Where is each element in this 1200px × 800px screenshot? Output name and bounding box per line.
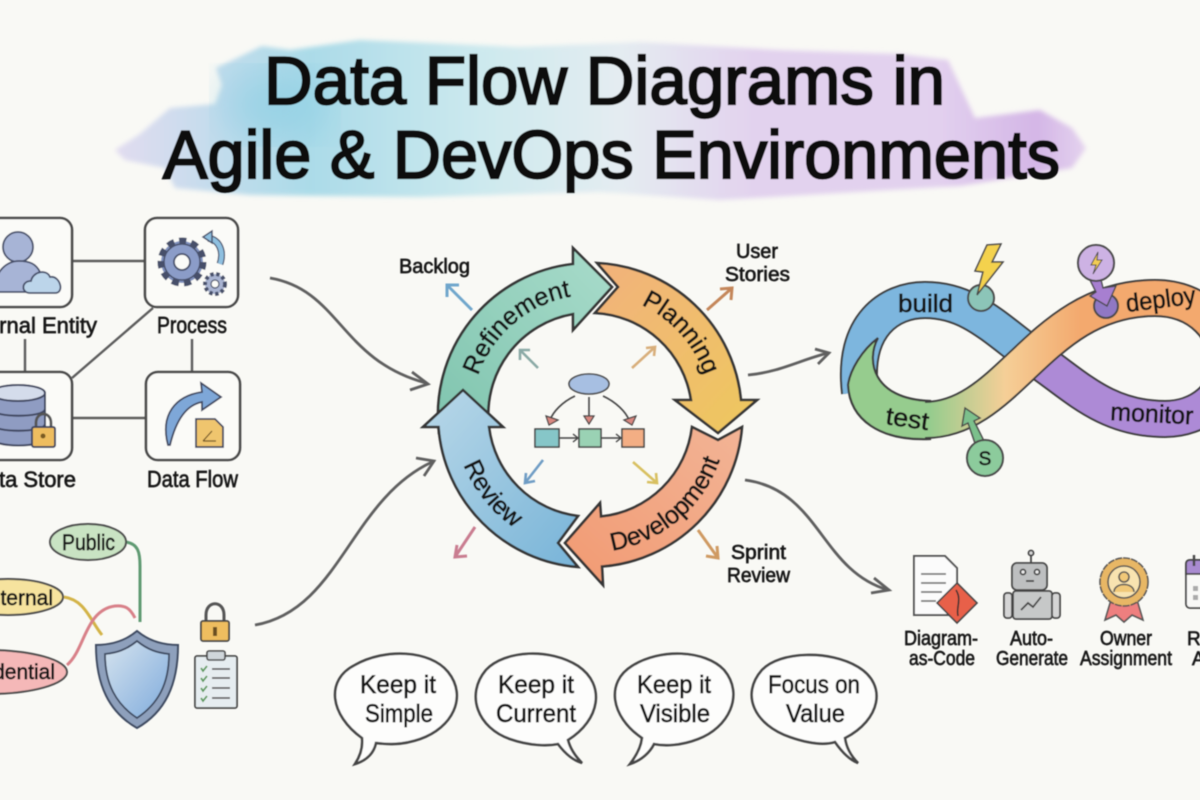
arrow: development [562, 424, 744, 589]
tool: diagram-as-code: Diagram- [904, 628, 978, 650]
panel: data classification [0, 524, 237, 728]
bubble: keep it current: Keep it [498, 671, 574, 699]
inner arrows [520, 347, 657, 483]
arrow: agile cycle to tools [745, 480, 889, 593]
ribbon: monitor [1035, 358, 1200, 419]
icon: robot [1004, 550, 1060, 619]
ribbon: build [859, 300, 1050, 392]
arrow: planning [592, 260, 761, 436]
icon: checklist clipboard [195, 651, 237, 708]
label: user stories [725, 241, 790, 286]
icon: calendar [1186, 555, 1200, 608]
label: backlog: Backlog [399, 256, 470, 278]
icon: deploy trigger [1078, 245, 1118, 318]
panel: best practices bubbles [335, 654, 877, 764]
title line 2: Agile & DevOps Environments [163, 117, 1060, 193]
bubble: focus on value: Value [786, 700, 845, 728]
tool: owner assignment: Owner [1100, 628, 1152, 650]
label: build: build [898, 290, 953, 318]
title line 1: Data Flow Diagrams in [264, 43, 945, 119]
watercolor title wash [115, 40, 1086, 200]
icon: person and cloud [0, 232, 60, 293]
bubble: keep it simple [335, 654, 457, 764]
arrow: DFD elements to agile cycle [270, 278, 428, 390]
external entity box [0, 218, 72, 307]
bubble: keep it visible [615, 654, 733, 764]
chart: devops infinity loop [848, 244, 1200, 476]
arrow: refinement: Refinement [462, 280, 572, 375]
tool: owner assignment: Assignment [1080, 648, 1172, 670]
label: monitor: monitor [1110, 398, 1194, 430]
icon: document and git diamond [914, 556, 977, 623]
arrow: planning: Planning [642, 290, 718, 375]
bubble: keep it simple: Keep it [360, 671, 436, 699]
bubble: keep it current: Current [496, 700, 576, 728]
bubble: focus on value: Focus on [768, 671, 860, 699]
bubble: keep it simple: Simple [365, 700, 433, 728]
label: sprint review: Sprint [731, 542, 786, 564]
tag: public: Public [62, 530, 115, 555]
label: sprint review [727, 542, 791, 587]
icon: gears [161, 231, 225, 294]
icon: database with lock [0, 385, 55, 447]
label: test: test [884, 402, 931, 436]
tag: internal [0, 579, 63, 615]
label: data flow: Data Flow [147, 466, 238, 492]
label: process: Process [157, 312, 227, 338]
process box [145, 218, 238, 307]
bubble: keep it current [476, 654, 596, 763]
arrow: classification to agile cycle [255, 458, 434, 625]
panel: DFD elements [0, 218, 240, 492]
icon: ribbon badge [1100, 558, 1148, 622]
title [115, 40, 1086, 200]
label: user stories: Stories [725, 264, 790, 286]
tool: diagram-as-code [904, 556, 978, 670]
arrow: refinement [436, 244, 614, 434]
ribbon: test curl [848, 338, 930, 439]
icon: test trigger: S [979, 449, 991, 470]
tag: public [50, 524, 126, 560]
arrow: development: Development [610, 455, 720, 552]
tag: confidential [0, 650, 67, 694]
icon: shield [96, 631, 178, 728]
bubble: keep it visible: Keep it [637, 671, 711, 699]
tool: auto-generate [996, 550, 1068, 670]
tool: owner assignment [1080, 558, 1172, 670]
tool: diagram-as-code: as-Code [909, 648, 975, 670]
arrow: agile cycle to devops loop [748, 349, 829, 375]
data store box [0, 372, 72, 460]
icon: curved arrow and note [166, 383, 223, 447]
bubble: keep it visible: Visible [640, 700, 710, 728]
arrow: review [419, 388, 582, 570]
central data flow mini diagram [535, 374, 644, 447]
tool: regular audits [1186, 555, 1200, 670]
label: sprint review: Review [727, 565, 791, 587]
label: deploy: deploy [1124, 282, 1198, 318]
tool: auto-generate: Auto- [1010, 628, 1053, 650]
ribbon: test and deploy [925, 298, 1200, 420]
icon: test trigger [962, 408, 1003, 476]
data flow box [146, 372, 240, 460]
outward arrows [447, 285, 732, 558]
arrow: review: Review [464, 458, 524, 526]
panel: tools [904, 550, 1200, 670]
bubble: focus on value [752, 655, 877, 763]
chart: agile cycle [399, 241, 792, 589]
connectors to shield [64, 542, 140, 665]
icon: padlock [201, 604, 229, 641]
label: user stories: User [736, 241, 778, 263]
tool: auto-generate: Generate [996, 648, 1068, 670]
icon: build lightning [968, 244, 1003, 311]
